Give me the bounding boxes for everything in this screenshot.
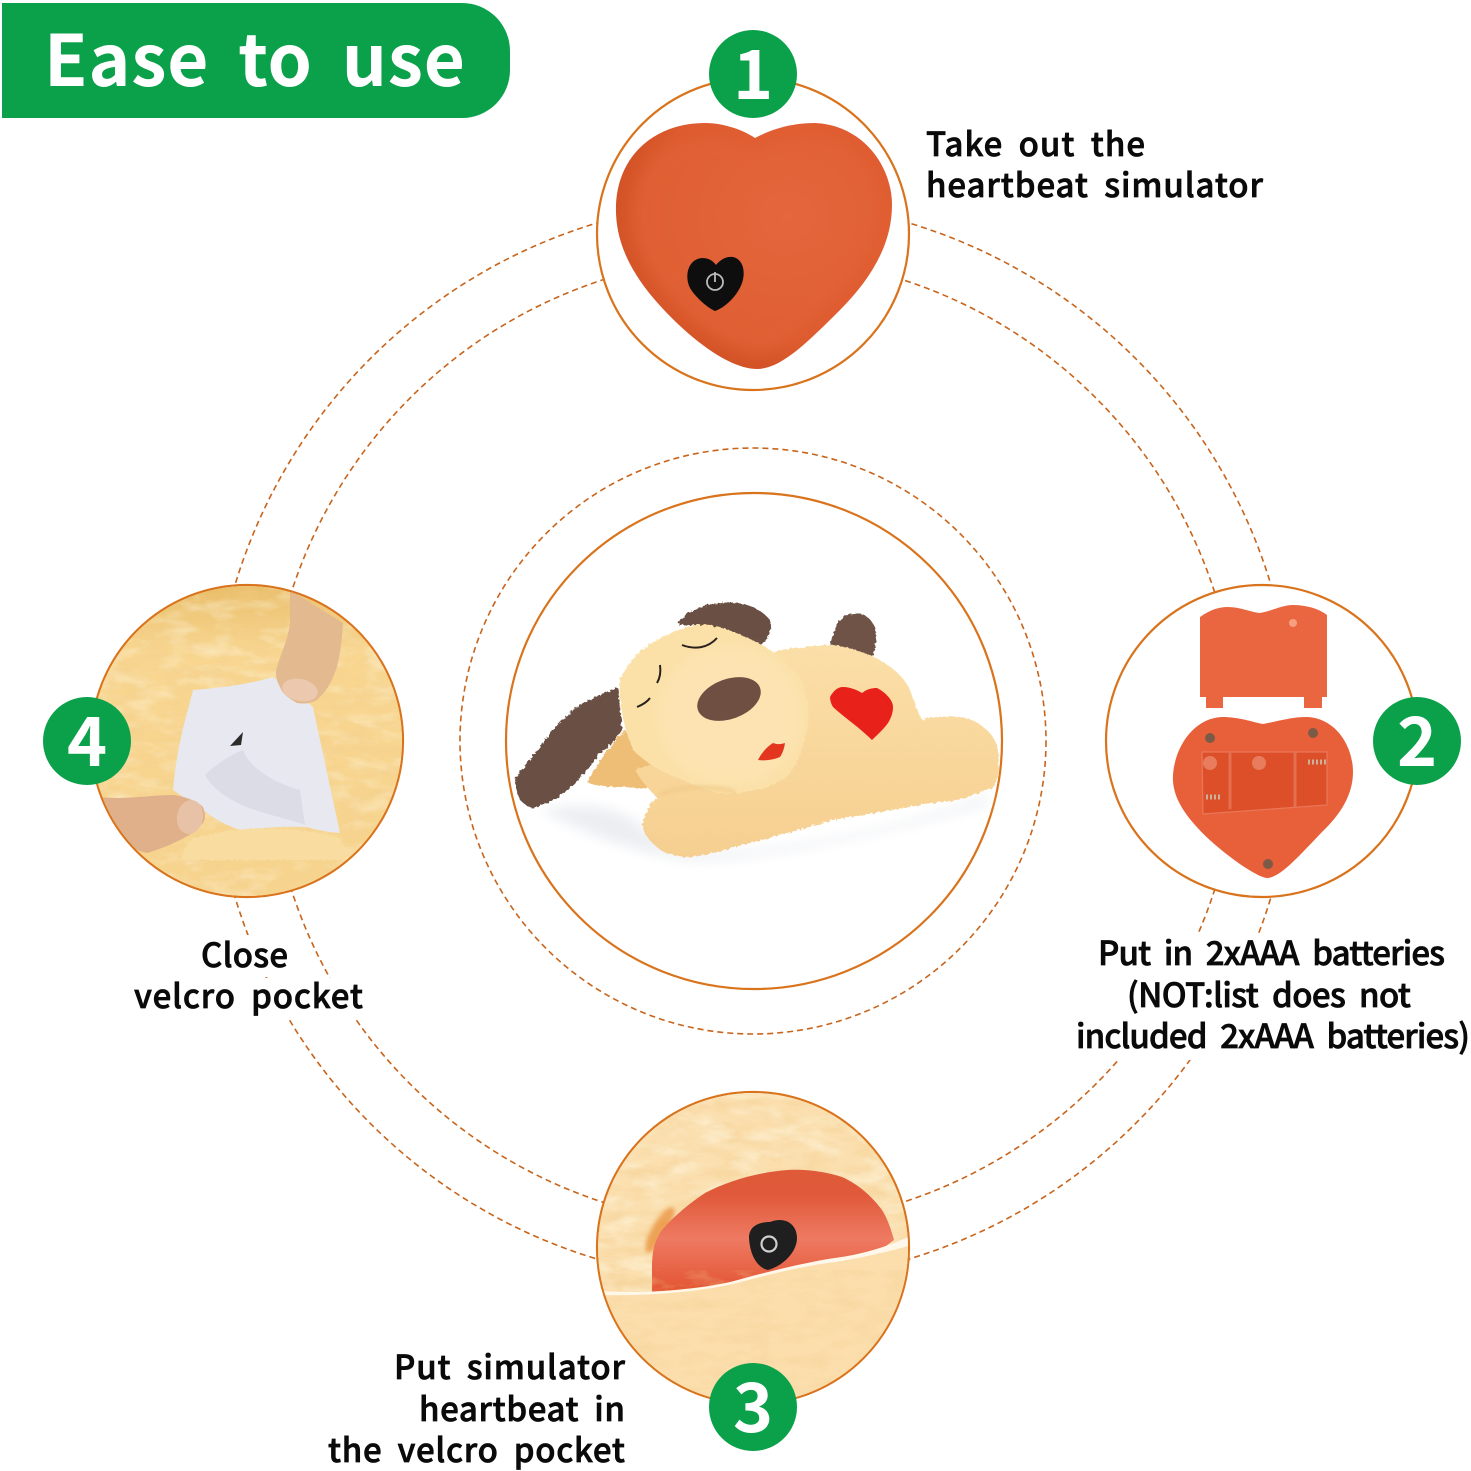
step badge 3: 3 (733, 1353, 773, 1452)
step badge 1 (709, 20, 797, 119)
heart simulator in pocket (652, 1170, 894, 1295)
sleeping eyes (637, 638, 717, 707)
open heart case (1173, 717, 1353, 878)
plush puppy illustration (515, 603, 999, 860)
left ear (515, 688, 622, 808)
step 4 panel (43, 580, 411, 906)
hind leg (587, 730, 665, 790)
step 2 caption: included 2xAAA batteries) (1076, 1010, 1470, 1058)
pocket gap (230, 732, 243, 746)
step badge 1: 1 (733, 20, 773, 119)
step badge 4: 4 (67, 687, 107, 786)
heart top ridge (633, 139, 876, 353)
white pocket lining (173, 677, 340, 833)
step 3 caption: the velcro pocket (328, 1424, 625, 1471)
step 2 caption: (NOT:list does not (1127, 969, 1411, 1017)
bottom finger (100, 795, 205, 853)
fur lower lip (180, 828, 350, 860)
step 1 caption: Take out the (926, 118, 1145, 166)
step 3 caption: Put simulator (394, 1341, 626, 1389)
step 1 caption (926, 118, 1264, 207)
step 1 panel (597, 20, 909, 390)
body (635, 645, 999, 857)
pocket shadow glow (642, 1205, 678, 1255)
icon: power button (687, 257, 744, 311)
white lining streak (600, 1236, 910, 1295)
step badge 3 (709, 1353, 797, 1452)
top ear (678, 603, 771, 645)
step badge 4 (43, 687, 131, 786)
step 3 caption: heartbeat in (419, 1383, 625, 1431)
top fingernail (282, 678, 318, 702)
step 4 caption: velcro pocket (134, 970, 363, 1018)
step 3 caption (328, 1341, 626, 1471)
icon: red heartbeat simulator (616, 123, 892, 369)
top finger (276, 590, 343, 704)
back ear (828, 613, 876, 660)
muzzle highlight (658, 647, 802, 783)
bottom fingernail (177, 800, 203, 834)
step 2 caption (1076, 927, 1470, 1058)
velcro pocket lip (604, 1248, 908, 1397)
battery cover (1200, 605, 1327, 708)
step badge 2 (1373, 687, 1461, 786)
tongue (758, 743, 785, 760)
paw seam (660, 787, 735, 795)
background rings (212, 200, 1294, 1282)
title banner: Ease to use (44, 5, 465, 107)
step 2 panel (1106, 585, 1461, 897)
step badge 2: 2 (1397, 687, 1437, 786)
caption masks (128, 933, 1471, 1060)
battery compartment (1202, 752, 1327, 814)
step 2 caption: Put in 2xAAA batteries (1098, 927, 1445, 975)
step 1 caption: heartbeat simulator (926, 159, 1264, 207)
pocket folds (205, 750, 305, 825)
step 3 panel (590, 1085, 916, 1452)
red heart (830, 687, 893, 740)
center product panel (460, 448, 1046, 1034)
step 4 caption: Close (201, 929, 288, 977)
floor shadow (540, 795, 990, 860)
muzzle patch (691, 669, 767, 729)
head (620, 625, 808, 793)
step 4 caption (134, 929, 363, 1018)
power button (749, 1220, 797, 1270)
